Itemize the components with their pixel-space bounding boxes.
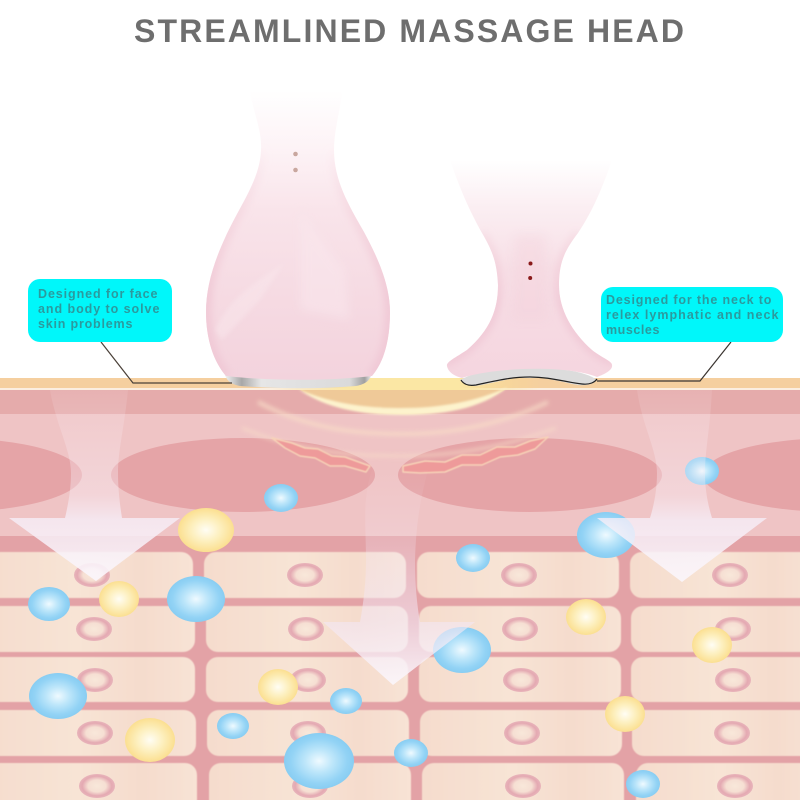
arrow: right downward <box>597 390 767 582</box>
cell layer background <box>0 536 800 800</box>
indicator dots <box>293 152 298 172</box>
icon: vase massage device <box>206 129 390 388</box>
leader line: right callout <box>597 342 731 381</box>
warm glow under massage heads <box>242 378 556 473</box>
third wave <box>242 428 556 456</box>
panel: skin cross-section <box>0 378 800 800</box>
leader line: left callout <box>101 342 232 383</box>
yellow nutrient bubbles <box>99 508 732 762</box>
arrow: left downward <box>9 390 180 581</box>
middle skin layer <box>0 414 800 536</box>
skin surface strip <box>0 378 800 388</box>
callout text: muscles <box>606 323 660 337</box>
left vibration band <box>272 438 370 472</box>
hourglass edge shading <box>447 233 612 366</box>
title: STREAMLINED MASSAGE HEAD <box>134 13 684 49</box>
callout text: relex lymphatic and neck <box>606 308 779 322</box>
surface highlight line <box>0 388 800 390</box>
metal base plate <box>224 372 372 388</box>
crescent light wave <box>298 387 508 415</box>
callout text: Designed for face <box>38 287 158 301</box>
right vibration band <box>403 437 548 473</box>
hourglass body <box>447 160 612 378</box>
contact edge outline <box>461 377 597 385</box>
metal contact edge <box>460 368 597 386</box>
callout text: and body to solve <box>38 302 160 316</box>
glow on skin surface <box>270 378 540 390</box>
vase edge shading <box>206 199 390 374</box>
warm layer beneath crescent <box>300 390 505 414</box>
indicator dots <box>528 262 532 280</box>
upper skin layer <box>0 390 800 414</box>
blue nutrient bubbles <box>28 457 719 798</box>
fat ellipses <box>0 438 800 512</box>
callout: face and body <box>28 279 172 342</box>
callout text: skin problems <box>38 317 133 331</box>
arrow: centre downward <box>323 470 475 685</box>
icon: hourglass neck massage device <box>447 183 612 386</box>
vase body <box>206 92 390 380</box>
callout: neck <box>601 287 784 342</box>
cell nuclei <box>74 563 753 798</box>
second wave <box>258 402 548 434</box>
callout text: Designed for the neck to <box>606 293 772 307</box>
cell rows <box>0 552 800 800</box>
